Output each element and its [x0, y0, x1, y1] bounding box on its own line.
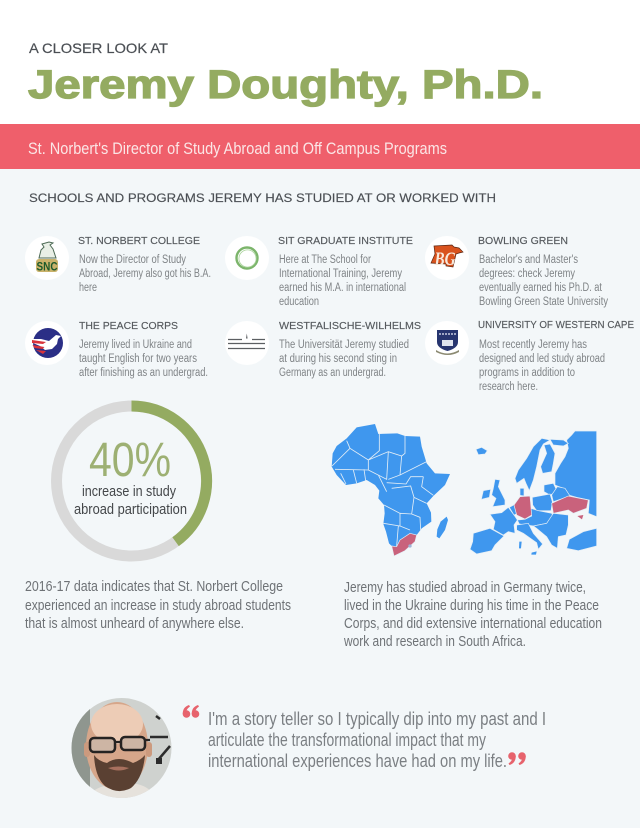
school: University of Western Cape: research here.: [479, 381, 538, 393]
school: University of Western Cape: designed and led study abroad: [479, 353, 605, 365]
school: Bowling Green: [425, 235, 608, 308]
South Africa highlight: [392, 533, 417, 556]
school: Bowling Green: BOWLING GREEN: [478, 235, 568, 247]
header panel: [0, 0, 640, 124]
subtitle banner: St. Norbert's Director of Study Abroad and Off Campus Programs: [28, 139, 447, 158]
school: St. Norbert College: [25, 235, 211, 294]
school: SIT Graduate Institute: SIT GRADUATE INSTITUTE: [278, 235, 413, 247]
icon: green ring: [225, 236, 269, 280]
Africa: [332, 424, 450, 556]
icon: BG logo: [425, 236, 469, 280]
icon: SNC logo: [25, 236, 69, 280]
quote: [183, 705, 546, 771]
icon: UWC crest: [425, 321, 469, 365]
school: SIT Graduate Institute: earned his M.A. in international: [279, 282, 406, 294]
school: The Peace Corps: THE PEACE CORPS: [79, 320, 178, 332]
quote: I'm a story teller so I typically dip into my past and I: [208, 709, 546, 729]
school: University of Western Cape: [425, 319, 634, 393]
quote: international experiences have had on my life.: [208, 751, 507, 771]
Ukraine highlight: [552, 496, 588, 513]
school: The Peace Corps: after finishing as an undergrad.: [79, 367, 208, 379]
donut caption: [74, 484, 187, 518]
school: St. Norbert College: Now the Director of Study: [79, 254, 186, 266]
icon: closing quote mark: [508, 752, 526, 765]
school: Westfalische-Wilhelms: [225, 320, 421, 379]
title: Jeremy Doughty, Ph.D.: [28, 63, 543, 107]
paragraph: time abroad: work and research in South Africa.: [343, 634, 526, 650]
paragraph: time abroad: [343, 580, 602, 650]
school: St. Norbert College: Abroad, Jeremy also got his B.A.: [79, 268, 211, 280]
school: University of Western Cape: Most recently Jeremy has: [479, 339, 587, 351]
school: SIT Graduate Institute: education: [279, 296, 319, 308]
icon: opening quote mark: [183, 705, 199, 718]
donut chart: 40%: [56, 406, 207, 556]
paragraph: study abroad data: 2016-17 data indicates that St. Norbert College: [25, 579, 283, 595]
school: Bowling Green: Bachelor's and Master's: [479, 254, 578, 266]
paragraph: study abroad data: that is almost unheard of anywhere else.: [25, 616, 244, 632]
school: SIT Graduate Institute: [225, 235, 413, 308]
donut value: 40%: [89, 434, 171, 487]
school: Westfalische-Wilhelms: at during his second sting in: [279, 353, 397, 365]
school: The Peace Corps: taught English for two years: [79, 353, 197, 365]
school: St. Norbert College: ST. NORBERT COLLEGE: [78, 235, 200, 247]
school: SIT Graduate Institute: International Training, Jeremy: [279, 268, 402, 280]
school: Westfalische-Wilhelms: The Universität Jeremy studied: [279, 339, 409, 351]
school: Bowling Green: degrees: check Jeremy: [479, 268, 575, 280]
school: University of Western Cape: programs in addition to: [479, 367, 575, 379]
paragraph: study abroad data: experienced an increase in study abroad students: [25, 598, 291, 614]
school: St. Norbert College: here: [79, 282, 97, 294]
school: Bowling Green: eventually earned his Ph.D. at: [479, 282, 603, 294]
section heading: SCHOOLS AND PROGRAMS JEREMY HAS STUDIED AT OR WORKED WITH: [29, 191, 496, 205]
paragraph: study abroad data: [25, 579, 291, 632]
map: Africa and Europe: [332, 424, 597, 556]
paragraph: time abroad: Jeremy has studied abroad in Germany twice,: [344, 580, 586, 596]
icon: Peace Corps dove: [25, 321, 69, 365]
icon: BG logo: BG: [434, 249, 456, 270]
Germany highlight: [514, 496, 532, 519]
school: Westfalische-Wilhelms: WESTFALISCHE-WILHELMS: [279, 320, 421, 332]
icon: Westfalische-Wilhelms logo: [225, 321, 269, 365]
icon: SNC logo: SNC: [36, 260, 58, 274]
school: Bowling Green: Bowling Green State University: [479, 296, 608, 308]
school: SIT Graduate Institute: Here at The School for: [279, 254, 371, 266]
quote: articulate the transformational impact that my: [208, 730, 486, 750]
donut caption: abroad participation: [74, 502, 187, 518]
eyebrow heading: A CLOSER LOOK AT: [29, 40, 168, 56]
Europe: [470, 431, 597, 555]
portrait photo: [70, 696, 174, 800]
school: The Peace Corps: [25, 320, 208, 379]
subtitle banner: [0, 124, 640, 169]
school: Westfalische-Wilhelms: Germany as an undergrad.: [279, 367, 386, 379]
donut caption: increase in study: [82, 484, 177, 500]
school: The Peace Corps: Jeremy lived in Ukraine and: [79, 339, 192, 351]
